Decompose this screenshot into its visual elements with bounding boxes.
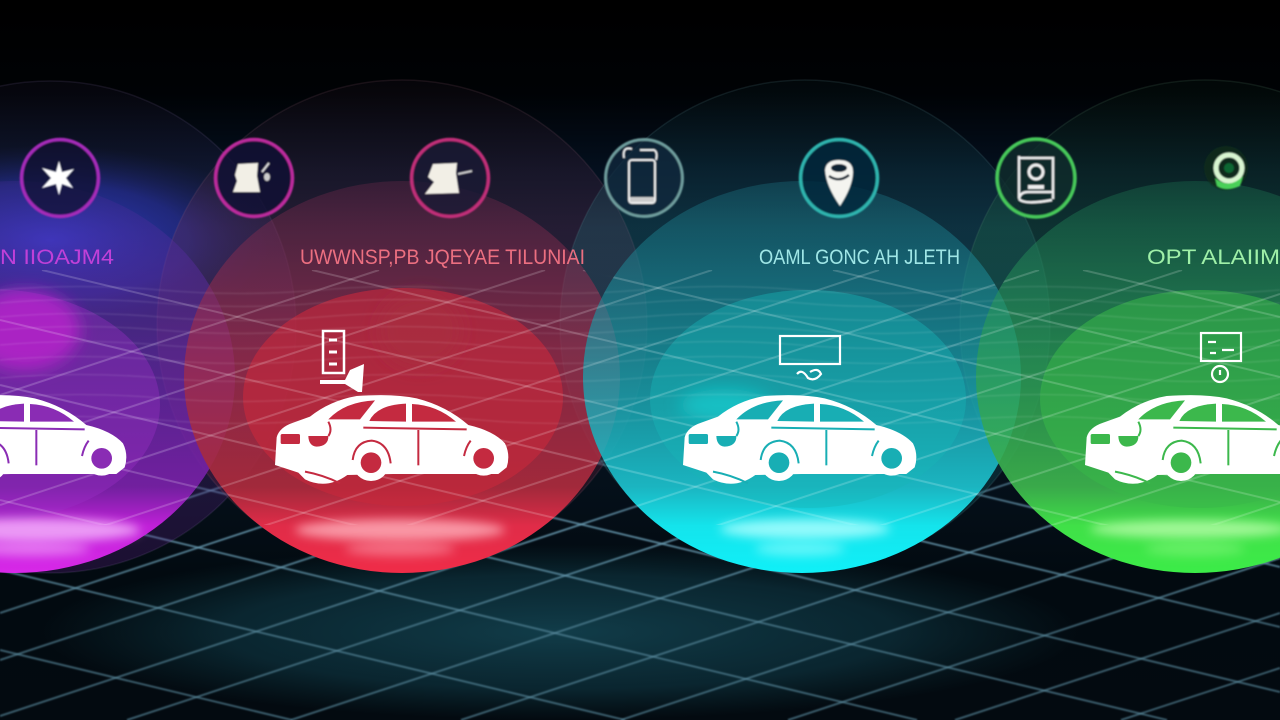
bottom bubble glows [0,518,1280,556]
car: red [275,395,508,484]
bubble: cyan [583,181,1021,573]
icon: star node [22,140,98,216]
heading: stage two: UWWNSP,PB JQEYAE TILUNIAI [300,246,585,269]
blue glow left [0,145,280,335]
car: cyan [683,395,916,484]
perspective grid floor [0,270,1280,720]
inner bubbles [0,288,1280,521]
bubble: red [184,181,620,573]
icon: phone node [606,140,682,216]
small icon: phone with hand [320,331,364,392]
dome: green [960,80,1280,570]
dome: cyan [560,80,1050,570]
heading: stage one: N IIOAJM4 [0,246,114,269]
icon: tower node one [216,140,292,216]
grid showing through the bubbles [0,270,1280,525]
teal floor glow [40,544,1080,720]
car: green [1085,395,1280,484]
bubble: purple [0,181,235,573]
dome: purple [0,81,296,573]
icon: location pin node [800,140,878,216]
small icon: dashboard [1201,333,1241,382]
dome: red [157,80,647,570]
icon: tower node two [412,140,488,216]
small icon: monitor [780,336,840,379]
connector line [99,176,1210,180]
icon: device book node [997,139,1075,217]
large glass domes [0,80,1280,573]
heading: stage four: OPT ALAIIM [1147,246,1280,269]
coloured lower bubbles [0,181,1280,573]
icon: gear node [1204,146,1248,190]
bubble: green [976,181,1280,573]
heading: stage three: OAML GONC AH JLETH [759,246,960,269]
car: purple [0,395,126,484]
